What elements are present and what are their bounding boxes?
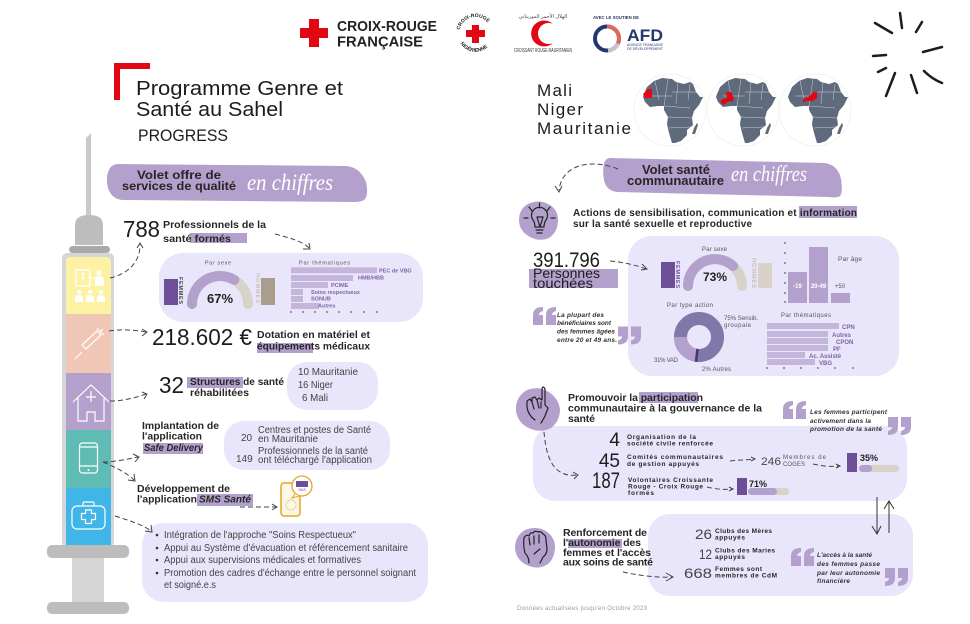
stat: 32 structures: 32 <box>159 372 184 398</box>
countries list: Mali <box>537 81 572 100</box>
arrow: hand to gouvernance <box>544 432 578 479</box>
heading: autonomie: l'autonomie des <box>563 537 641 549</box>
map: Niger <box>779 74 851 146</box>
heading: participation <box>568 392 762 425</box>
banner: volet santé communautaire <box>603 158 842 197</box>
arrow: phone to Safe Delivery <box>103 454 139 462</box>
panel: bullet list: Intégration de l'approche "Soins Respectueux" <box>164 530 356 541</box>
text: SMS Santé: Développement de <box>137 483 230 495</box>
stat: 788 professionnels: Professionnels de la <box>163 219 266 231</box>
text: Safe Delivery: l'application <box>142 430 202 442</box>
panel: Safe Delivery figures: 149 <box>236 454 253 465</box>
panel: gouvernance: 45 <box>599 451 620 472</box>
banner: volet santé communautaire: communautaire <box>627 174 724 188</box>
panel: Safe Delivery figures <box>224 421 390 470</box>
banner: volet offre de services <box>107 164 367 202</box>
arrow: phone to SMS Santé <box>103 462 135 481</box>
arrow: kit to bullet panel <box>115 516 152 532</box>
banner: volet offre de services: en chiffres <box>247 170 333 195</box>
panel: gouvernance: 246 <box>761 456 781 468</box>
panel: sensibilisation charts: Ac. Assisté <box>809 354 842 360</box>
stat: 32 structures: réhabilitées <box>190 387 249 399</box>
panel: bullet list <box>142 523 428 602</box>
panel: sensibilisation charts: CPON <box>836 340 853 346</box>
syringe segment: matériel <box>66 314 111 373</box>
countries list: Niger <box>537 100 583 119</box>
logo: AFD: DE DÉVELOPPEMENT <box>627 46 664 51</box>
panel: formation charts: HOMMES <box>254 273 260 303</box>
arrow: yellow to 788 <box>110 243 143 278</box>
panel: gouvernance: formés <box>628 490 654 497</box>
panel: autonomie: Clubs des Maries <box>715 548 775 554</box>
panel: autonomie: 12 <box>699 546 712 562</box>
panel: formation charts <box>159 253 423 322</box>
panel: autonomie <box>648 514 913 596</box>
panel: bullet list: Appui au Système d'évacuation et référencement sanitaire <box>164 543 408 554</box>
panel: formation charts: FEMMES <box>177 277 183 304</box>
panel: sensibilisation charts: +50 <box>835 284 846 290</box>
panel: bullet list: Appui aux supervisions médicales et formatives <box>164 555 361 566</box>
arrow: personnes to chart <box>610 261 647 270</box>
stat: 32 structures <box>159 372 284 399</box>
stat: 218.602 euros: Dotation en matériel et <box>257 329 370 341</box>
quote: femmes participent: Les femmes participent <box>810 409 888 416</box>
stat: 788 professionnels: santé formés <box>163 233 231 245</box>
panel: formation charts: SONUB <box>311 296 331 302</box>
panel: gouvernance: société civile renforcée <box>627 440 713 448</box>
panel: sensibilisation charts: Par âge <box>838 256 862 263</box>
panel: formation charts: Par sexe <box>205 260 231 266</box>
logo: AFD: AVEC LE SOUTIEN DE <box>593 15 639 20</box>
panel: gouvernance: COGES <box>783 462 805 468</box>
map: Mauritanie <box>634 74 706 146</box>
panel: autonomie: par leur autonomie <box>816 570 880 577</box>
panel: autonomie: L'accès à la santé <box>817 552 872 559</box>
heading: autonomie: Renforcement de <box>563 527 647 539</box>
quote: plupart des bénéficiaires: des femmes âgées <box>557 328 615 336</box>
panel: autonomie: Femmes sont <box>715 566 763 573</box>
icon: light bulb <box>519 202 558 240</box>
panel: gouvernance: de gestion appuyés <box>627 461 699 468</box>
title: Santé au Sahel <box>136 99 283 121</box>
map: Mali <box>707 74 779 146</box>
arrow: SMS Santé to phone <box>240 504 277 510</box>
syringe <box>47 133 129 614</box>
heading: autonomie: femmes et l'accès <box>563 547 651 559</box>
panel: autonomie: appuyés <box>715 554 745 561</box>
logo: Croix-Rouge française: CROIX-ROUGE <box>337 18 437 35</box>
title <box>114 63 343 145</box>
panel: gouvernance: 187 <box>592 468 620 493</box>
stat: 391.796 personnes touchées <box>529 249 618 291</box>
panel: sensibilisation charts: Autres <box>832 333 852 339</box>
panel: sensibilisation charts: 20-49 <box>811 284 827 290</box>
panel: gouvernance <box>533 426 907 501</box>
syringe segment: applications <box>66 430 111 488</box>
panel: autonomie: financière <box>817 578 850 585</box>
icon: SMS phone: SMS <box>298 488 306 492</box>
logo: AFD: AFD <box>627 26 663 45</box>
panel: gouvernance: Organisation de la <box>627 434 696 441</box>
panel: gouvernance: Membres de <box>783 455 827 461</box>
panel: gouvernance: Volontaires Croissante <box>628 477 713 484</box>
panel: sensibilisation charts: -19 <box>793 284 802 290</box>
quote: femmes participent: activement dans la <box>810 418 871 425</box>
stat: 218.602 euros: 218.602 € <box>152 324 252 350</box>
heading: actions de sensibilisation: Actions de sensibilisation, communication et information <box>573 208 857 219</box>
logo: Croix-Rouge française: FRANÇAISE <box>337 34 423 50</box>
icon: raised finger hand <box>516 387 560 431</box>
panel: autonomie: Clubs des Mères <box>715 528 772 535</box>
countries list <box>537 81 631 138</box>
panel: structures by country <box>287 362 378 410</box>
heading: participation: santé <box>568 413 595 425</box>
panel: gouvernance: Rouge - Croix Rouge <box>628 484 703 490</box>
logo: Croix-Rouge nigérienne: CROIX-ROUGE <box>456 14 490 30</box>
panel: formation charts: PEC de VBG <box>379 268 412 274</box>
panel: sensibilisation charts: groupale <box>724 323 752 329</box>
stat: 391.796 personnes touchées: touchées <box>533 275 593 291</box>
arrow: banner to section <box>555 164 618 192</box>
arrow: peach to dotation <box>109 329 147 336</box>
logo: Croix-Rouge française <box>300 18 437 50</box>
panel: sensibilisation charts: PF <box>833 347 841 353</box>
syringe segment: formation <box>66 257 111 314</box>
text: SMS Santé: SMS Santé <box>199 494 251 506</box>
syringe segment: structures <box>66 373 111 430</box>
panel: formation charts: Soins respectueux <box>311 290 361 296</box>
panel: sensibilisation charts: Par sexe <box>702 247 728 253</box>
panel: formation charts: Par thématiques <box>299 260 350 266</box>
arrow: 788 to chart <box>275 234 310 249</box>
arrow: vertical exchange <box>872 497 894 534</box>
text: Safe Delivery: Safe Delivery <box>144 443 203 454</box>
title: PROGRESS <box>138 126 228 145</box>
panel: sensibilisation charts: 75% Sensib. <box>724 316 758 322</box>
stat: 391.796 personnes touchées: Personnes <box>533 265 600 281</box>
text: Safe Delivery <box>142 420 219 454</box>
heading: autonomie: aux soins de santé <box>563 556 653 568</box>
panel: Safe Delivery figures: Centres et postes de Santé <box>258 425 371 436</box>
panel: structures by country: 10 Mauritanie <box>298 366 358 378</box>
panel: autonomie: 668 <box>684 565 712 581</box>
banner: volet offre de services: Volet offre de <box>137 168 221 182</box>
quote: plupart des bénéficiaires <box>533 307 641 344</box>
panel: sensibilisation charts: CPN <box>842 325 855 331</box>
panel: sensibilisation charts: HOMMES <box>750 258 756 288</box>
panel: sensibilisation charts: Par type action <box>667 303 713 309</box>
logo: Croix-Rouge nigérienne <box>456 14 490 52</box>
text: Safe Delivery: Implantation de <box>142 420 219 432</box>
panel: sensibilisation charts: VBG <box>819 361 832 367</box>
panel: Safe Delivery figures: Professionnels de la santé <box>258 446 368 457</box>
icon: sunburst <box>873 13 942 96</box>
heading: autonomie <box>563 527 653 568</box>
arrow: autonomie to panel <box>623 572 673 581</box>
logo: Croix-Rouge nigérienne: NIGÉRIENNE <box>460 42 488 52</box>
panel: sensibilisation charts: 73% <box>703 270 727 284</box>
logo: AFD: AGENCE FRANÇAISE <box>627 43 664 47</box>
panel: sensibilisation charts: FEMMES <box>674 261 680 288</box>
panel: sensibilisation charts: 31% VAD <box>654 358 679 364</box>
countries list: Mauritanie <box>537 119 631 138</box>
panel: autonomie: des femmes passe <box>817 561 880 568</box>
logo: AFD <box>593 15 664 51</box>
panel: Safe Delivery figures: en Mauritanie <box>258 434 318 445</box>
quote: plupart des bénéficiaires: La plupart des <box>557 312 604 319</box>
text: SMS Santé: l'application <box>137 494 197 506</box>
quote: femmes participent: promotion de la santé <box>809 426 882 433</box>
panel: formation charts: 67% <box>207 291 233 306</box>
panel: gouvernance: Comités communautaires <box>627 454 723 461</box>
icon: raised fist <box>515 528 555 568</box>
syringe segment: appui <box>66 488 111 545</box>
panel: structures by country: 16 Niger <box>298 379 333 391</box>
panel: sensibilisation charts <box>628 236 899 376</box>
panel: Safe Delivery figures: ont téléchargé l'application <box>258 455 372 466</box>
panel: bullet list: et soigné.e.s <box>164 580 216 591</box>
banner: volet santé communautaire: Volet santé <box>642 163 710 177</box>
heading: participation: Promouvoir la participation <box>568 392 703 404</box>
panel: gouvernance: 71% <box>749 479 767 489</box>
panel: bullet list: Promotion des cadres d'échange entre le personnel soignant <box>164 568 416 579</box>
quote: femmes participent <box>783 401 911 435</box>
logo: Croissant-Rouge mauritanien <box>514 13 572 54</box>
heading: actions de sensibilisation <box>573 206 857 230</box>
quote: plupart des bénéficiaires: bénéficiaires sont <box>557 320 612 327</box>
panel: gouvernance: 35% <box>860 453 878 463</box>
title: Programme Genre et <box>136 78 343 100</box>
panel: formation charts: PCIME <box>331 283 349 289</box>
panel: gouvernance: 4 <box>609 430 620 451</box>
quote: plupart des bénéficiaires: entre 20 et 49 ans. <box>557 337 617 344</box>
panel: autonomie: 26 <box>695 526 712 542</box>
stat: 32 structures: Structures de santé <box>190 376 284 388</box>
logo: Croissant-Rouge mauritanien: الهلال الأحمر الموريتاني <box>519 13 567 20</box>
panel: formation charts: Autres <box>318 304 335 310</box>
panel: formation charts: HMB/HBB <box>358 276 384 282</box>
panel: Safe Delivery figures: 20 <box>241 433 253 444</box>
stat: 218.602 euros: équipements médicaux <box>257 340 370 352</box>
stat: 218.602 euros <box>152 324 370 353</box>
banner: volet offre de services: services de qualité <box>122 179 236 193</box>
heading: actions de sensibilisation: sur la santé sexuelle et reproductive <box>573 219 752 230</box>
panel: sensibilisation charts: 2% Autres <box>702 367 731 373</box>
arrow: house to structures <box>110 392 147 401</box>
panel: sensibilisation charts: Par thématiques <box>781 313 831 319</box>
stat: 788 professionnels: 788 <box>123 216 160 242</box>
banner: volet santé communautaire: en chiffres <box>731 161 807 186</box>
panel: autonomie: membres de CdM <box>715 572 777 580</box>
logo: Croissant-Rouge mauritanien: CROISSANT ROUGE MAURITANIEN <box>514 48 572 54</box>
footer note: Données actualisées jusqu'en Octobre 2023 <box>517 606 648 612</box>
icon: SMS phone <box>281 476 312 516</box>
panel: autonomie: appuyés <box>715 534 745 542</box>
stat: 788 professionnels <box>123 216 266 245</box>
panel: structures by country: 6 Mali <box>302 392 328 404</box>
text: SMS Santé <box>137 483 253 506</box>
heading: participation: communautaire à la gouvernance de la <box>568 402 762 414</box>
stat: 391.796 personnes touchées: 391.796 <box>533 249 600 272</box>
